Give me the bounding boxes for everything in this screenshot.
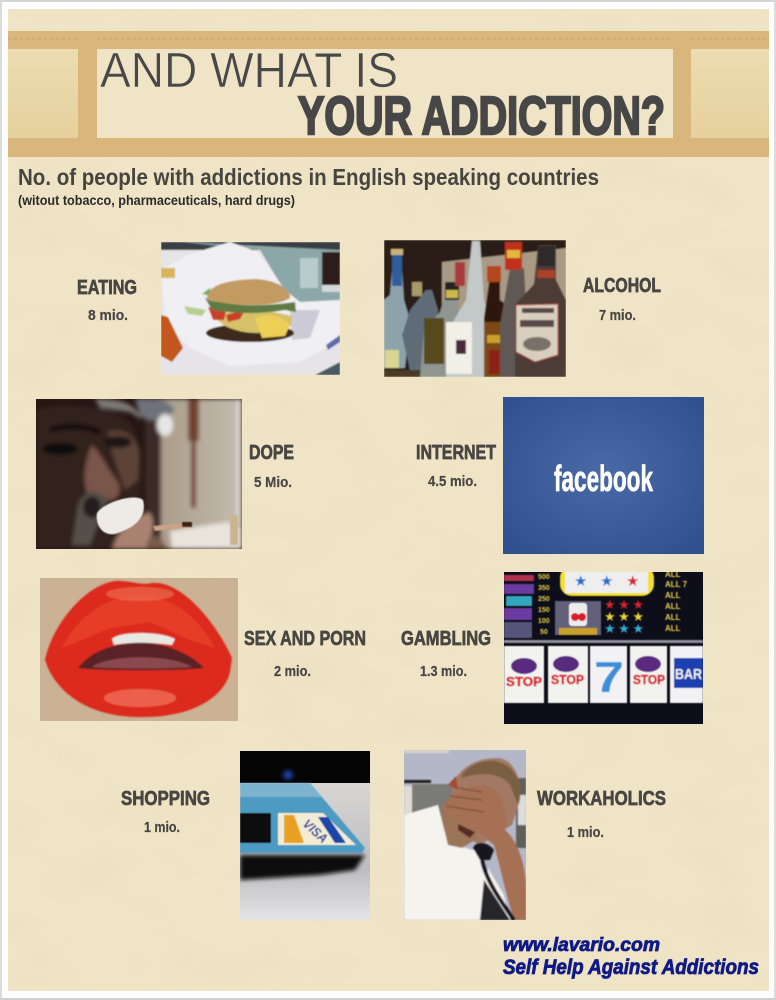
red star row: ★★★ (604, 597, 644, 612)
photo: slot machine: 250 (538, 596, 550, 603)
value: gambling: 1.3 mio. (420, 663, 467, 680)
item: eating (77, 242, 340, 375)
photo: slot machine: ALL (665, 570, 681, 579)
title plate (97, 49, 673, 138)
tall bottle with red cap (499, 268, 526, 377)
top stars: ★ (626, 573, 639, 590)
item: workaholics (404, 750, 666, 920)
value: internet: 4.5 mio. (428, 473, 477, 490)
payout table right: ALL 7 (665, 580, 688, 589)
value: dope: 5 Mio. (254, 474, 292, 491)
label: internet: INTERNET (416, 442, 496, 464)
mouth (78, 642, 204, 670)
smoke cloud (97, 498, 144, 534)
left banner panel (8, 49, 78, 138)
photo: burger (161, 242, 340, 375)
title banner (8, 31, 769, 157)
item: shopping (121, 751, 370, 920)
value: workaholics: 1 mio. (567, 824, 604, 841)
title line 1: AND WHAT IS (100, 44, 398, 98)
photo: slot machine: 350 (538, 585, 550, 592)
grape decanter (402, 290, 438, 370)
subtitle: No. of people with addictions in English speaking countries (18, 164, 599, 190)
photo: slot machine (504, 566, 703, 724)
star rows (604, 600, 644, 634)
teeth (112, 633, 175, 645)
reel stop 1: STOP (506, 674, 542, 689)
photo: smoker (36, 399, 242, 549)
top stars: ★ (574, 573, 587, 590)
photo: slot machine: ALL (665, 591, 681, 600)
photo: credit card (240, 751, 370, 920)
label: alcohol: ALCOHOL (583, 275, 661, 297)
reel stop 3: STOP (633, 672, 665, 687)
hand and arm (442, 785, 526, 920)
cherry panel (555, 601, 601, 635)
photo: slot machine: 150 (538, 607, 550, 614)
item: internet (416, 397, 704, 554)
burger fill (206, 324, 294, 342)
value: sex and porn: 2 mio. (274, 663, 311, 680)
subtitle note: (witout tobacco, pharmaceuticals, hard drugs) (18, 192, 295, 208)
visa label: VISA (300, 816, 331, 846)
reel seven: 7 (594, 653, 624, 702)
right banner panel (691, 49, 769, 138)
photo: slot machine: 100 (538, 618, 550, 625)
reels (504, 646, 544, 703)
photo: lips (40, 578, 238, 721)
joint (153, 522, 192, 531)
top stars (574, 575, 638, 586)
reel stop 2: STOP (551, 672, 584, 687)
payout values left: 500 (538, 574, 550, 581)
top reels (559, 572, 655, 597)
label: dope: DOPE (249, 442, 294, 464)
value: shopping: 1 mio. (144, 819, 180, 836)
photo: slot machine: ALL (665, 624, 681, 633)
reel bar (674, 658, 703, 688)
photo: bottles (384, 240, 566, 377)
bun (207, 279, 290, 305)
value: eating: 8 mio. (88, 307, 128, 324)
yellow star row: ★★★ (604, 609, 644, 624)
reel bar: BAR (675, 666, 702, 683)
photo: facebook (503, 397, 704, 554)
item: alcohol (384, 240, 661, 377)
photo: stressed worker (404, 750, 526, 920)
item: dope (36, 399, 294, 549)
photo: slot machine: ALL (665, 602, 681, 611)
red liqueur (483, 280, 505, 324)
facebook logotype: facebook (554, 458, 654, 499)
clear bottle (384, 270, 410, 368)
value: alcohol: 7 mio. (599, 307, 636, 324)
phone (473, 843, 494, 860)
label: eating: EATING (77, 277, 137, 299)
label: workaholics: WORKAHOLICS (537, 788, 666, 810)
head (452, 758, 520, 845)
item: gambling (401, 566, 703, 724)
face (36, 406, 141, 549)
photo: slot machine: ALL (665, 613, 681, 622)
Southern Comfort (515, 245, 566, 377)
blue star row: ★★★ (604, 621, 644, 636)
label: sex and porn: SEX AND PORN (244, 628, 366, 650)
footer url: www.lavario.com (503, 935, 660, 956)
neck and chin (440, 812, 478, 848)
item: sex and porn (40, 578, 366, 721)
tall clear bottle (446, 241, 492, 377)
photo: slot machine: 50 (540, 629, 548, 636)
label: gambling: GAMBLING (401, 628, 491, 650)
shirt (404, 805, 490, 920)
hand bottom (112, 513, 153, 549)
hair (95, 399, 142, 420)
label: shopping: SHOPPING (121, 788, 210, 810)
top stars: ★ (600, 573, 613, 590)
gold label bottle (420, 296, 462, 377)
